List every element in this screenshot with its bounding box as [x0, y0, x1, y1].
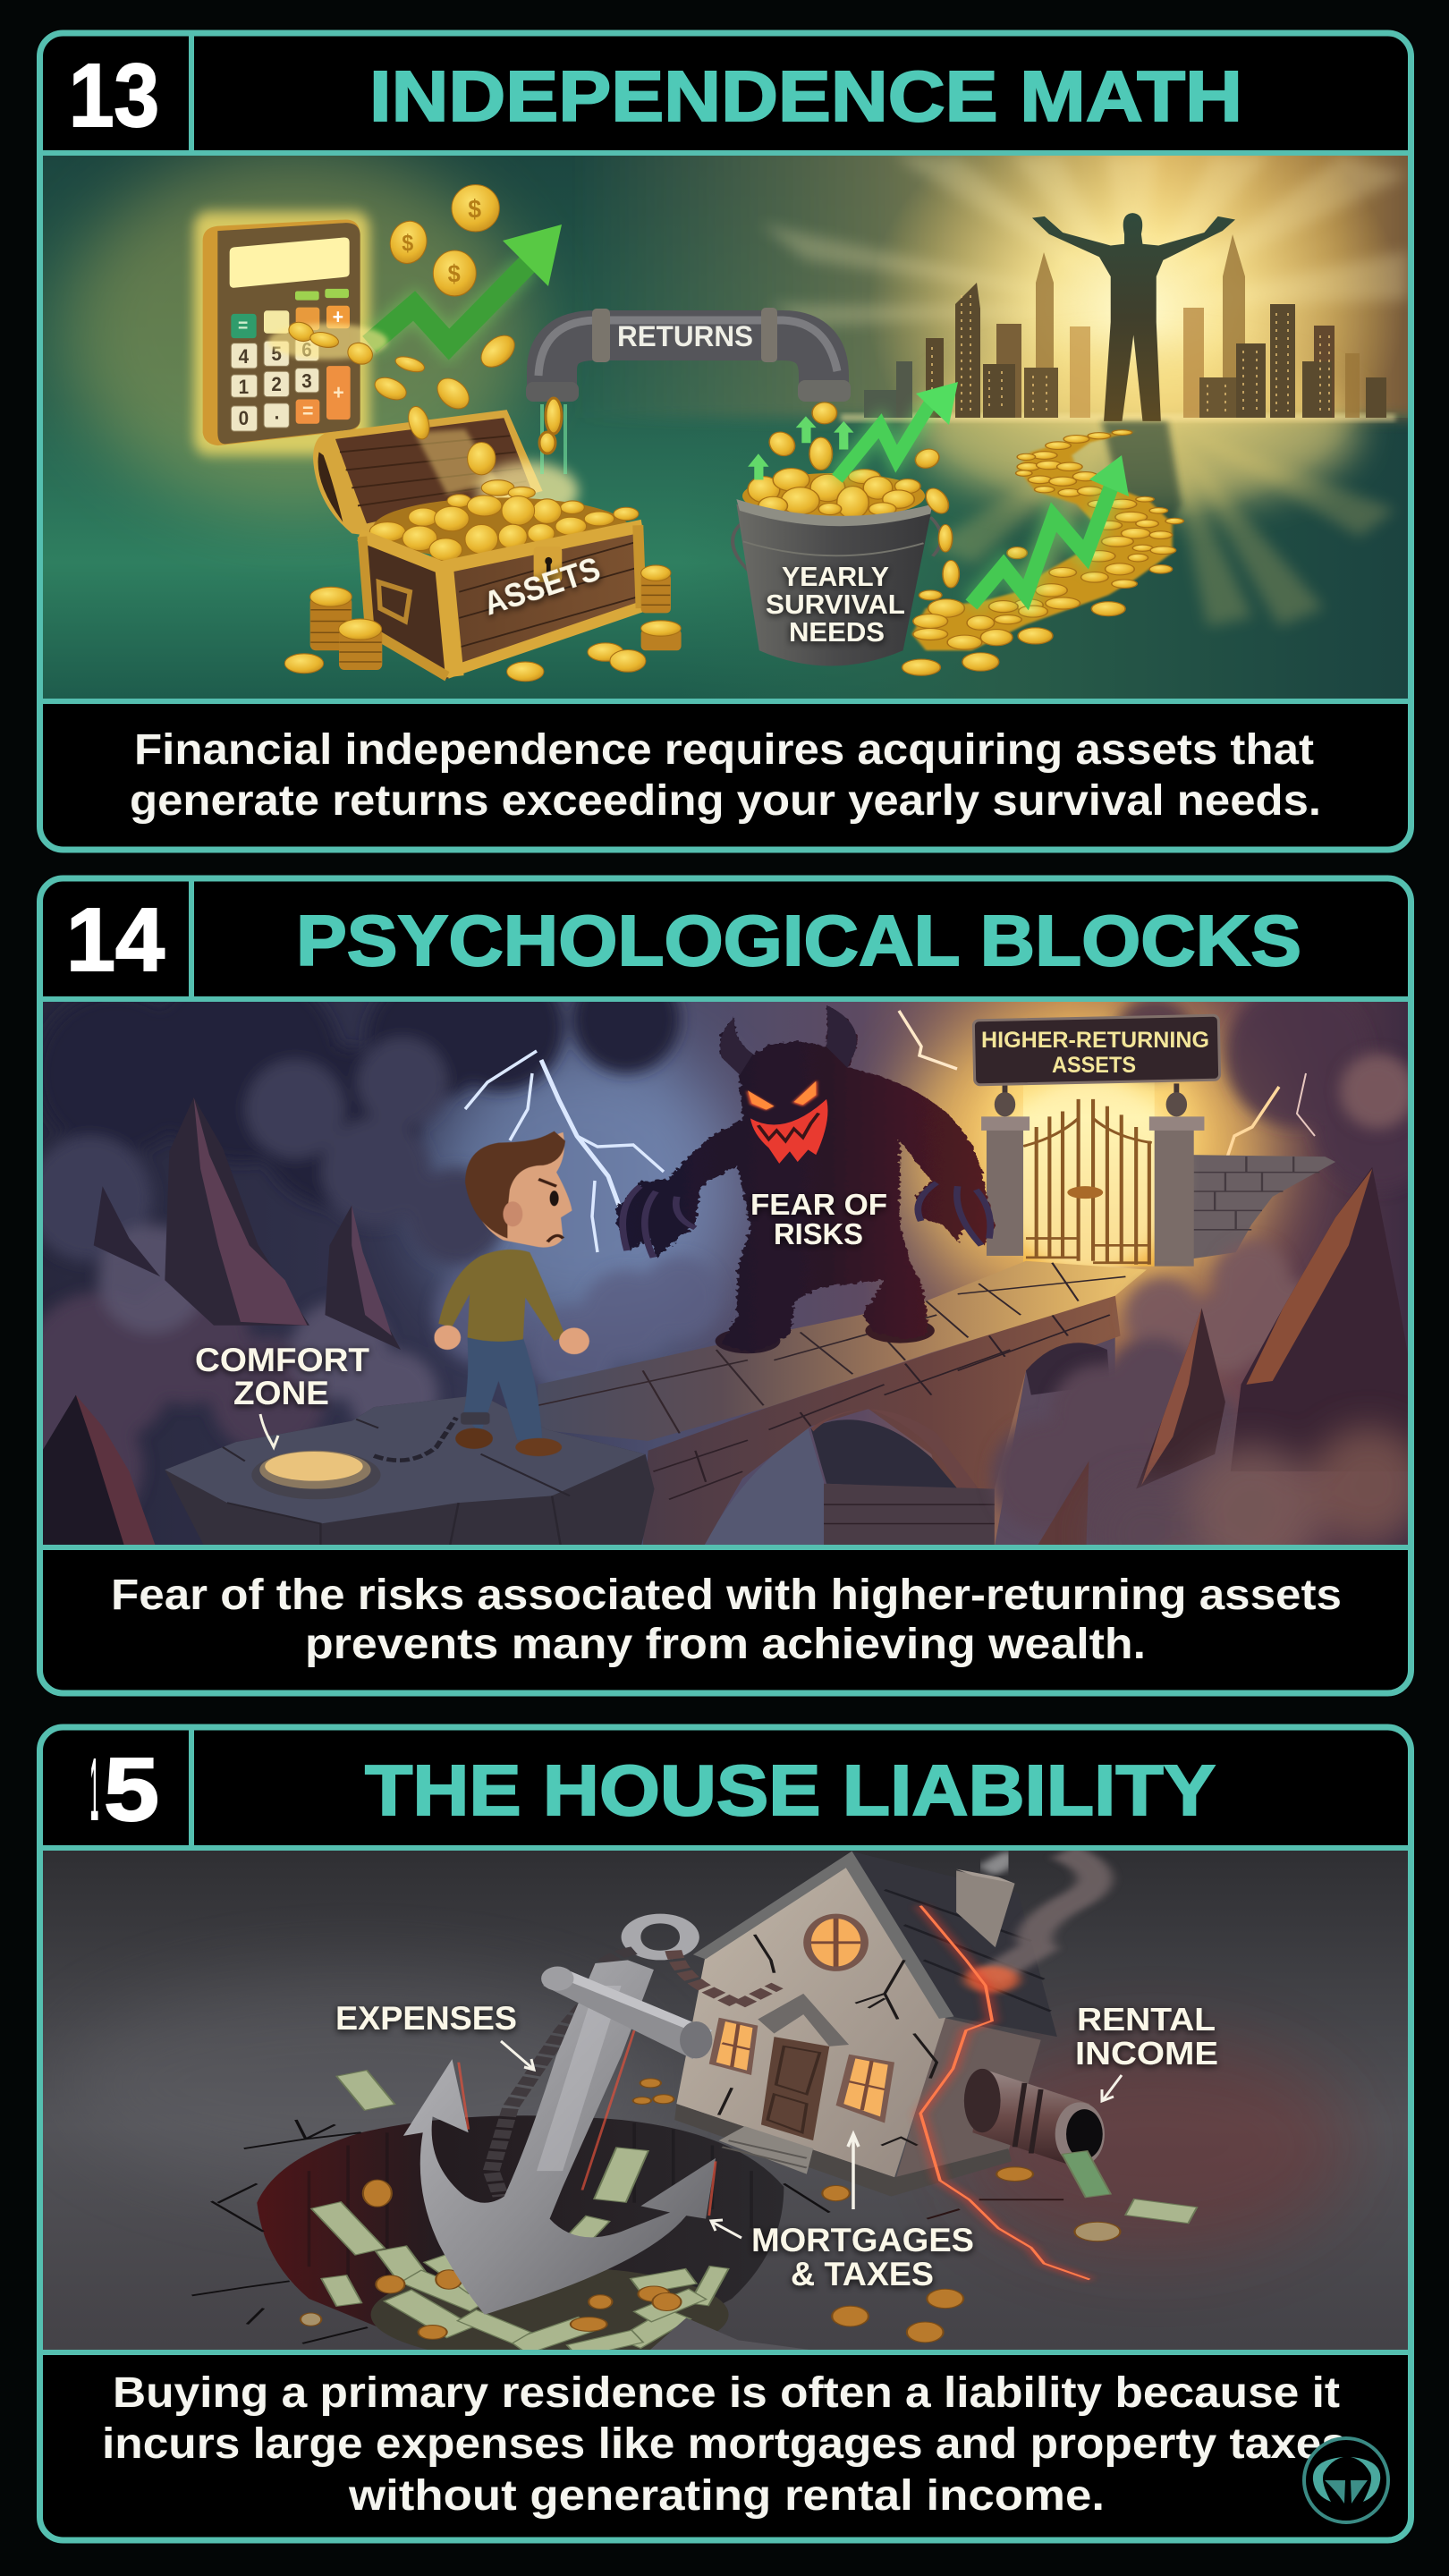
calculator: 5 [271, 342, 282, 365]
coin trail [902, 430, 1183, 675]
comfort zone ring [251, 1418, 456, 1499]
illustration: house liability scene [43, 1851, 1409, 2362]
returns pipe [526, 308, 851, 474]
label: rental income [1075, 2001, 1218, 2101]
lightning [465, 1011, 1315, 1252]
calculator [194, 211, 369, 455]
caption: independence math [130, 726, 1321, 825]
label: fear of risks: FEAR OF [750, 1188, 887, 1221]
label: rental income: INCOME [1075, 2035, 1218, 2072]
number 14: 14 [66, 890, 165, 990]
number 15: 1 [90, 1740, 98, 1840]
label: mortgages and taxes: MORTGAGES [751, 2222, 974, 2258]
label: rental income: RENTAL [1077, 2001, 1216, 2038]
rock spires right [1037, 1167, 1413, 1547]
arrow: green rising arrow 3 [971, 455, 1129, 605]
calculator: + [333, 305, 343, 328]
sign: higher-returning assets: ASSETS [1052, 1053, 1136, 1078]
foreground fog [1091, 1427, 1427, 1588]
panel: the house liability [39, 1727, 1411, 2540]
red crack and smoke [920, 1852, 1095, 2280]
label: comfort zone [195, 1342, 369, 1447]
fog behind right rocks [991, 1054, 1415, 1556]
frame and dividers [39, 33, 1411, 850]
coin stacks [284, 565, 682, 682]
calculator: 3 [301, 369, 312, 393]
anchor with chain [403, 1914, 777, 2315]
calculator: = [238, 316, 248, 336]
number 15: 5 [104, 1740, 159, 1840]
calculator: + [333, 381, 344, 404]
arrow: green rising arrow 1 [369, 225, 562, 344]
label: mortgages and taxes [711, 2134, 974, 2292]
label: fear of risks [750, 1188, 887, 1250]
caption: the house liability: incurs large expenses like mortgages and property taxes [102, 2420, 1347, 2468]
panel: psychological blocks [0, 878, 1440, 1693]
panel: independence math [39, 33, 1431, 850]
skyline [864, 234, 1386, 418]
falling coins: $ [448, 260, 461, 288]
arrow: green rising arrow 2 [837, 382, 958, 479]
label: comfort zone: ZONE [233, 1375, 329, 1411]
logo badge [1304, 2438, 1388, 2522]
illustration: psychological blocks scene [0, 966, 1440, 1588]
calculator: 0 [239, 406, 249, 429]
label: comfort zone: COMFORT [195, 1342, 369, 1378]
title: independence math: INDEPENDENCE MATH [369, 56, 1242, 136]
sign: higher-returning assets [973, 1015, 1220, 1085]
calculator: . [275, 400, 279, 424]
frame and dividers [39, 878, 1411, 1693]
label: yearly survival needs: YEARLY [782, 561, 889, 592]
caption: independence math: Financial independence requires acquiring assets that [134, 726, 1314, 774]
label: fear of risks: RISKS [774, 1217, 863, 1250]
caption: the house liability: without generating rental income. [348, 2472, 1105, 2520]
caption: the house liability: Buying a primary residence is often a liability because it [113, 2369, 1340, 2417]
label: yearly survival needs [766, 561, 905, 648]
calculator: 2 [271, 372, 282, 395]
illustration: independence math scene [43, 156, 1408, 699]
ledge [165, 1395, 655, 1547]
frame and dividers [39, 1727, 1411, 2540]
storm clouds [0, 966, 1440, 1538]
boy figure [434, 1131, 589, 1456]
caption: psychological blocks [111, 1572, 1342, 1668]
treasure chest with coins [313, 403, 642, 679]
title: the house liability: THE HOUSE LIABILITY [365, 1750, 1216, 1830]
falling coins: $ [402, 232, 414, 257]
survival needs bucket [733, 402, 959, 665]
gate and wall [981, 1079, 1335, 1273]
label: mortgages and taxes: & TAXES [791, 2256, 934, 2292]
returns pipe: RETURNS [617, 320, 753, 352]
rock spires left [40, 1097, 401, 1547]
label: assets: ASSETS [479, 550, 605, 623]
falling coins: $ [468, 195, 482, 224]
calculator: = [302, 399, 313, 422]
falling coins [268, 185, 520, 415]
label: expenses: EXPENSES [335, 2000, 517, 2037]
number 13: 13 [69, 46, 159, 146]
sign: higher-returning assets: HIGHER-RETURNING [981, 1028, 1209, 1053]
label: expenses [335, 2000, 534, 2070]
monster: fear of risks [616, 1005, 995, 1353]
rental income pipe [964, 2069, 1197, 2224]
caption: psychological blocks: Fear of the risks associated with higher-returning assets [111, 1572, 1342, 1619]
house [674, 1852, 1057, 2197]
coins and loose bills [301, 2071, 1120, 2343]
stone bridge [538, 1261, 1147, 1547]
calculator: 6 [301, 338, 312, 361]
label: yearly survival needs: NEEDS [789, 616, 885, 648]
ground hole [192, 2115, 829, 2362]
person silhouette [1032, 213, 1235, 569]
calculator: 1 [239, 375, 249, 398]
caption: psychological blocks: prevents many from achieving wealth. [305, 1621, 1146, 1668]
caption: independence math: generate returns exceeding your yearly survival needs. [130, 777, 1321, 825]
caption: the house liability [102, 2369, 1347, 2520]
calculator: 4 [239, 344, 249, 368]
label: yearly survival needs: SURVIVAL [766, 589, 905, 620]
title: psychological blocks: PSYCHOLOGICAL BLOCKS [296, 901, 1301, 980]
